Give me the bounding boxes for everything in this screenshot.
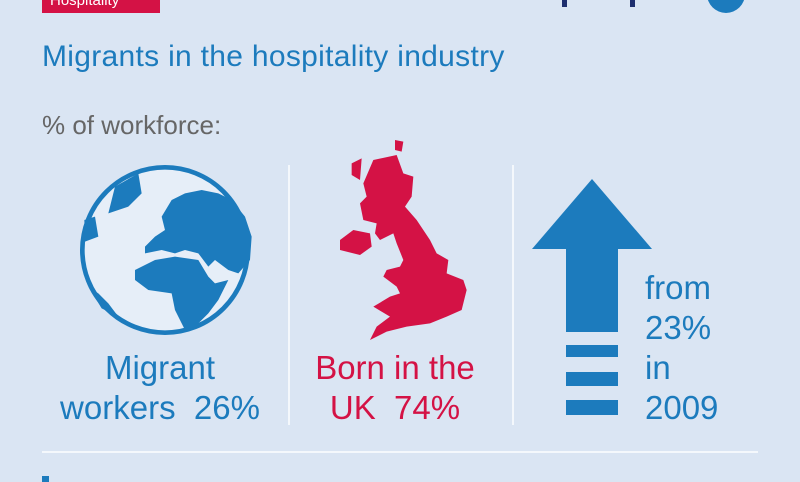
caption: from 23% in 2009: in	[645, 349, 671, 386]
logo	[562, 0, 744, 13]
caption: migrant workers: workers 26%	[60, 389, 260, 426]
icon: UK map	[340, 140, 467, 340]
caption: from 23% in 2009	[645, 269, 718, 426]
caption: migrant workers	[60, 349, 260, 426]
caption: from 23% in 2009: 2009	[645, 389, 718, 426]
caption: born in UK: UK 74%	[330, 389, 460, 426]
title: Migrants in the hospitality industry	[42, 40, 505, 73]
icon: up arrow	[532, 179, 652, 415]
caption: born in UK	[315, 349, 475, 426]
subtitle: % of workforce:	[42, 110, 221, 140]
caption: migrant workers: Migrant	[105, 349, 215, 386]
caption: born in UK: Born in the	[315, 349, 475, 386]
dividers	[288, 165, 290, 425]
caption: from 23% in 2009: from	[645, 269, 711, 306]
tag: Hospitality	[42, 0, 160, 13]
icon: globe	[80, 165, 252, 335]
bottom marker	[42, 476, 49, 482]
caption: from 23% in 2009: 23%	[645, 309, 711, 346]
